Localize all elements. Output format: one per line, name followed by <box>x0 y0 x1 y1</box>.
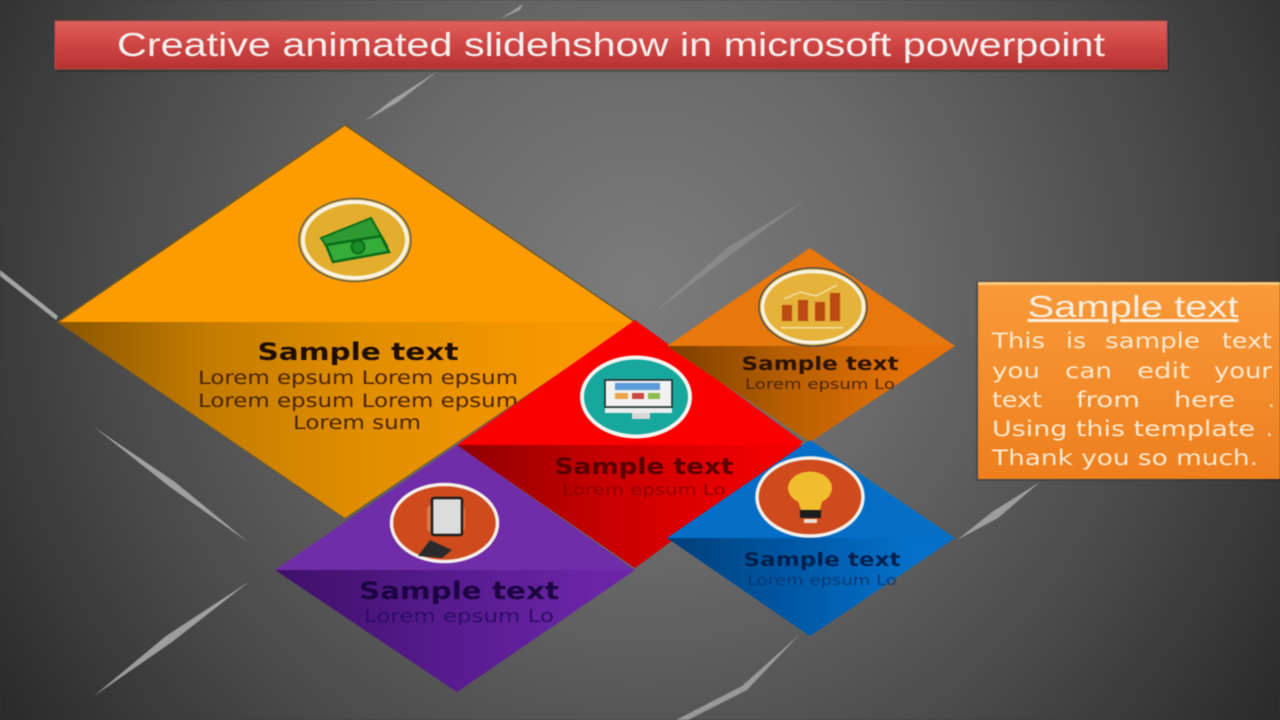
title banner <box>55 21 1169 72</box>
body text: red: Lorem epsum Lo <box>562 481 726 499</box>
body text: side box: This <box>991 329 1045 353</box>
heading: yellow: Sample text <box>258 338 458 366</box>
panel: orange diamond <box>667 248 955 442</box>
body text: blue: Lorem epsum Lo <box>747 573 897 589</box>
heading: blue: Sample text <box>744 549 900 571</box>
body text: yellow: Lorem epsum Lorem epsum <box>198 390 518 412</box>
body text: side box: sample <box>1105 329 1200 353</box>
body text: side box: here <box>1174 388 1235 412</box>
icon: bar chart <box>759 268 867 346</box>
panel: purple diamond <box>275 445 635 692</box>
body text: side box: your <box>1214 359 1272 383</box>
body text: side box: . <box>1268 388 1275 412</box>
body text: side box <box>991 329 1275 470</box>
body text: side box: . <box>1266 417 1273 441</box>
panel: red diamond <box>457 320 803 568</box>
body text: side box: Thank you so much. <box>991 446 1258 470</box>
body text: orange: Lorem epsum Lo <box>745 377 895 393</box>
body text: yellow: Lorem epsum Lorem epsum <box>198 367 518 389</box>
icon: money <box>299 198 411 282</box>
body text: side box: Using this template <box>992 417 1255 441</box>
body text: yellow: Lorem sum <box>293 412 421 434</box>
heading: side box: Sample text <box>1028 289 1239 324</box>
heading: purple: Sample text <box>359 577 559 605</box>
panel: yellow diamond <box>58 125 635 518</box>
body text: side box: edit <box>1137 359 1190 383</box>
body text: yellow <box>198 367 518 434</box>
heading: orange: Sample text <box>742 353 898 375</box>
title text: Creative animated slidehshow in microsoft powerpoint <box>117 26 1105 63</box>
body text: purple: Lorem epsum Lo <box>364 606 554 627</box>
body text: side box: text <box>1222 329 1272 353</box>
icon: phone in hand <box>392 484 498 562</box>
body text: side box: can <box>1065 359 1112 383</box>
heading: red: Sample text <box>554 455 734 480</box>
body text: side box: is <box>1066 329 1086 353</box>
panel: side text box <box>976 281 1280 481</box>
icon: light bulb <box>757 458 863 536</box>
icon: monitor <box>582 358 690 436</box>
body text: side box: from <box>1076 388 1140 412</box>
panel: blue diamond <box>667 440 955 636</box>
body text: side box: you <box>992 359 1040 383</box>
body text: side box: text <box>992 388 1042 412</box>
